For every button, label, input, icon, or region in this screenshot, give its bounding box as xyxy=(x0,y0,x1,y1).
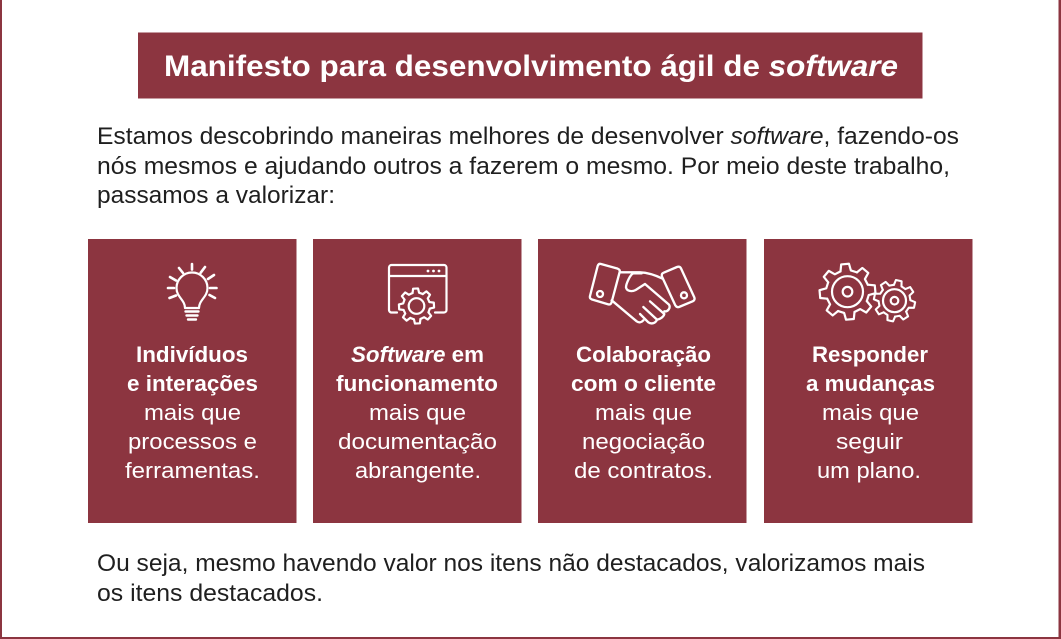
card text: a mudanças xyxy=(806,371,935,396)
card text xyxy=(336,342,498,483)
icon: handshake xyxy=(590,264,695,323)
panel: responder a mudanças xyxy=(764,239,972,523)
intro text: nós mesmos e ajudando outros a fazerem o mesmo. Por meio deste trabalho, xyxy=(97,153,950,180)
icon: browser window with gear xyxy=(389,265,446,324)
card text xyxy=(806,342,935,483)
card text: processos e xyxy=(128,429,257,454)
card text: funcionamento xyxy=(336,371,498,396)
card text: com o cliente xyxy=(571,371,716,396)
panel: indivíduos e interações xyxy=(88,239,296,523)
intro text: passamos a valorizar: xyxy=(97,182,335,209)
card text: mais que xyxy=(369,400,466,425)
card text xyxy=(125,342,260,483)
card text: Colaboração xyxy=(576,342,711,367)
closing text xyxy=(97,550,925,607)
panel: colaboração com o cliente xyxy=(538,239,746,523)
card text: Responder xyxy=(812,342,928,367)
card text xyxy=(571,342,716,483)
card text: mais que xyxy=(822,400,919,425)
panel: software em funcionamento xyxy=(313,239,522,523)
title xyxy=(138,32,922,98)
card text: um plano. xyxy=(817,458,921,483)
card text: Indivíduos xyxy=(136,342,248,367)
icon: light bulb xyxy=(168,264,216,320)
closing text: Ou seja, mesmo havendo valor nos itens não destacados, valorizamos mais xyxy=(97,550,925,577)
card text: mais que xyxy=(595,400,692,425)
card text: Software em xyxy=(351,342,484,367)
icon: two gears xyxy=(817,262,919,325)
card text: mais que xyxy=(144,400,241,425)
card text: negociação xyxy=(582,429,705,454)
card text: seguir xyxy=(836,429,903,454)
intro text xyxy=(97,123,959,209)
card text: documentação xyxy=(338,429,497,454)
card text: de contratos. xyxy=(574,458,713,483)
card text: abrangente. xyxy=(355,458,481,483)
title: Manifesto para desenvolvimento ágil de software xyxy=(164,50,898,83)
intro text: Estamos descobrindo maneiras melhores de desenvolver software, fazendo-os xyxy=(97,123,959,150)
card text: e interações xyxy=(127,371,258,396)
closing text: os itens destacados. xyxy=(97,580,323,607)
card text: ferramentas. xyxy=(125,458,260,483)
